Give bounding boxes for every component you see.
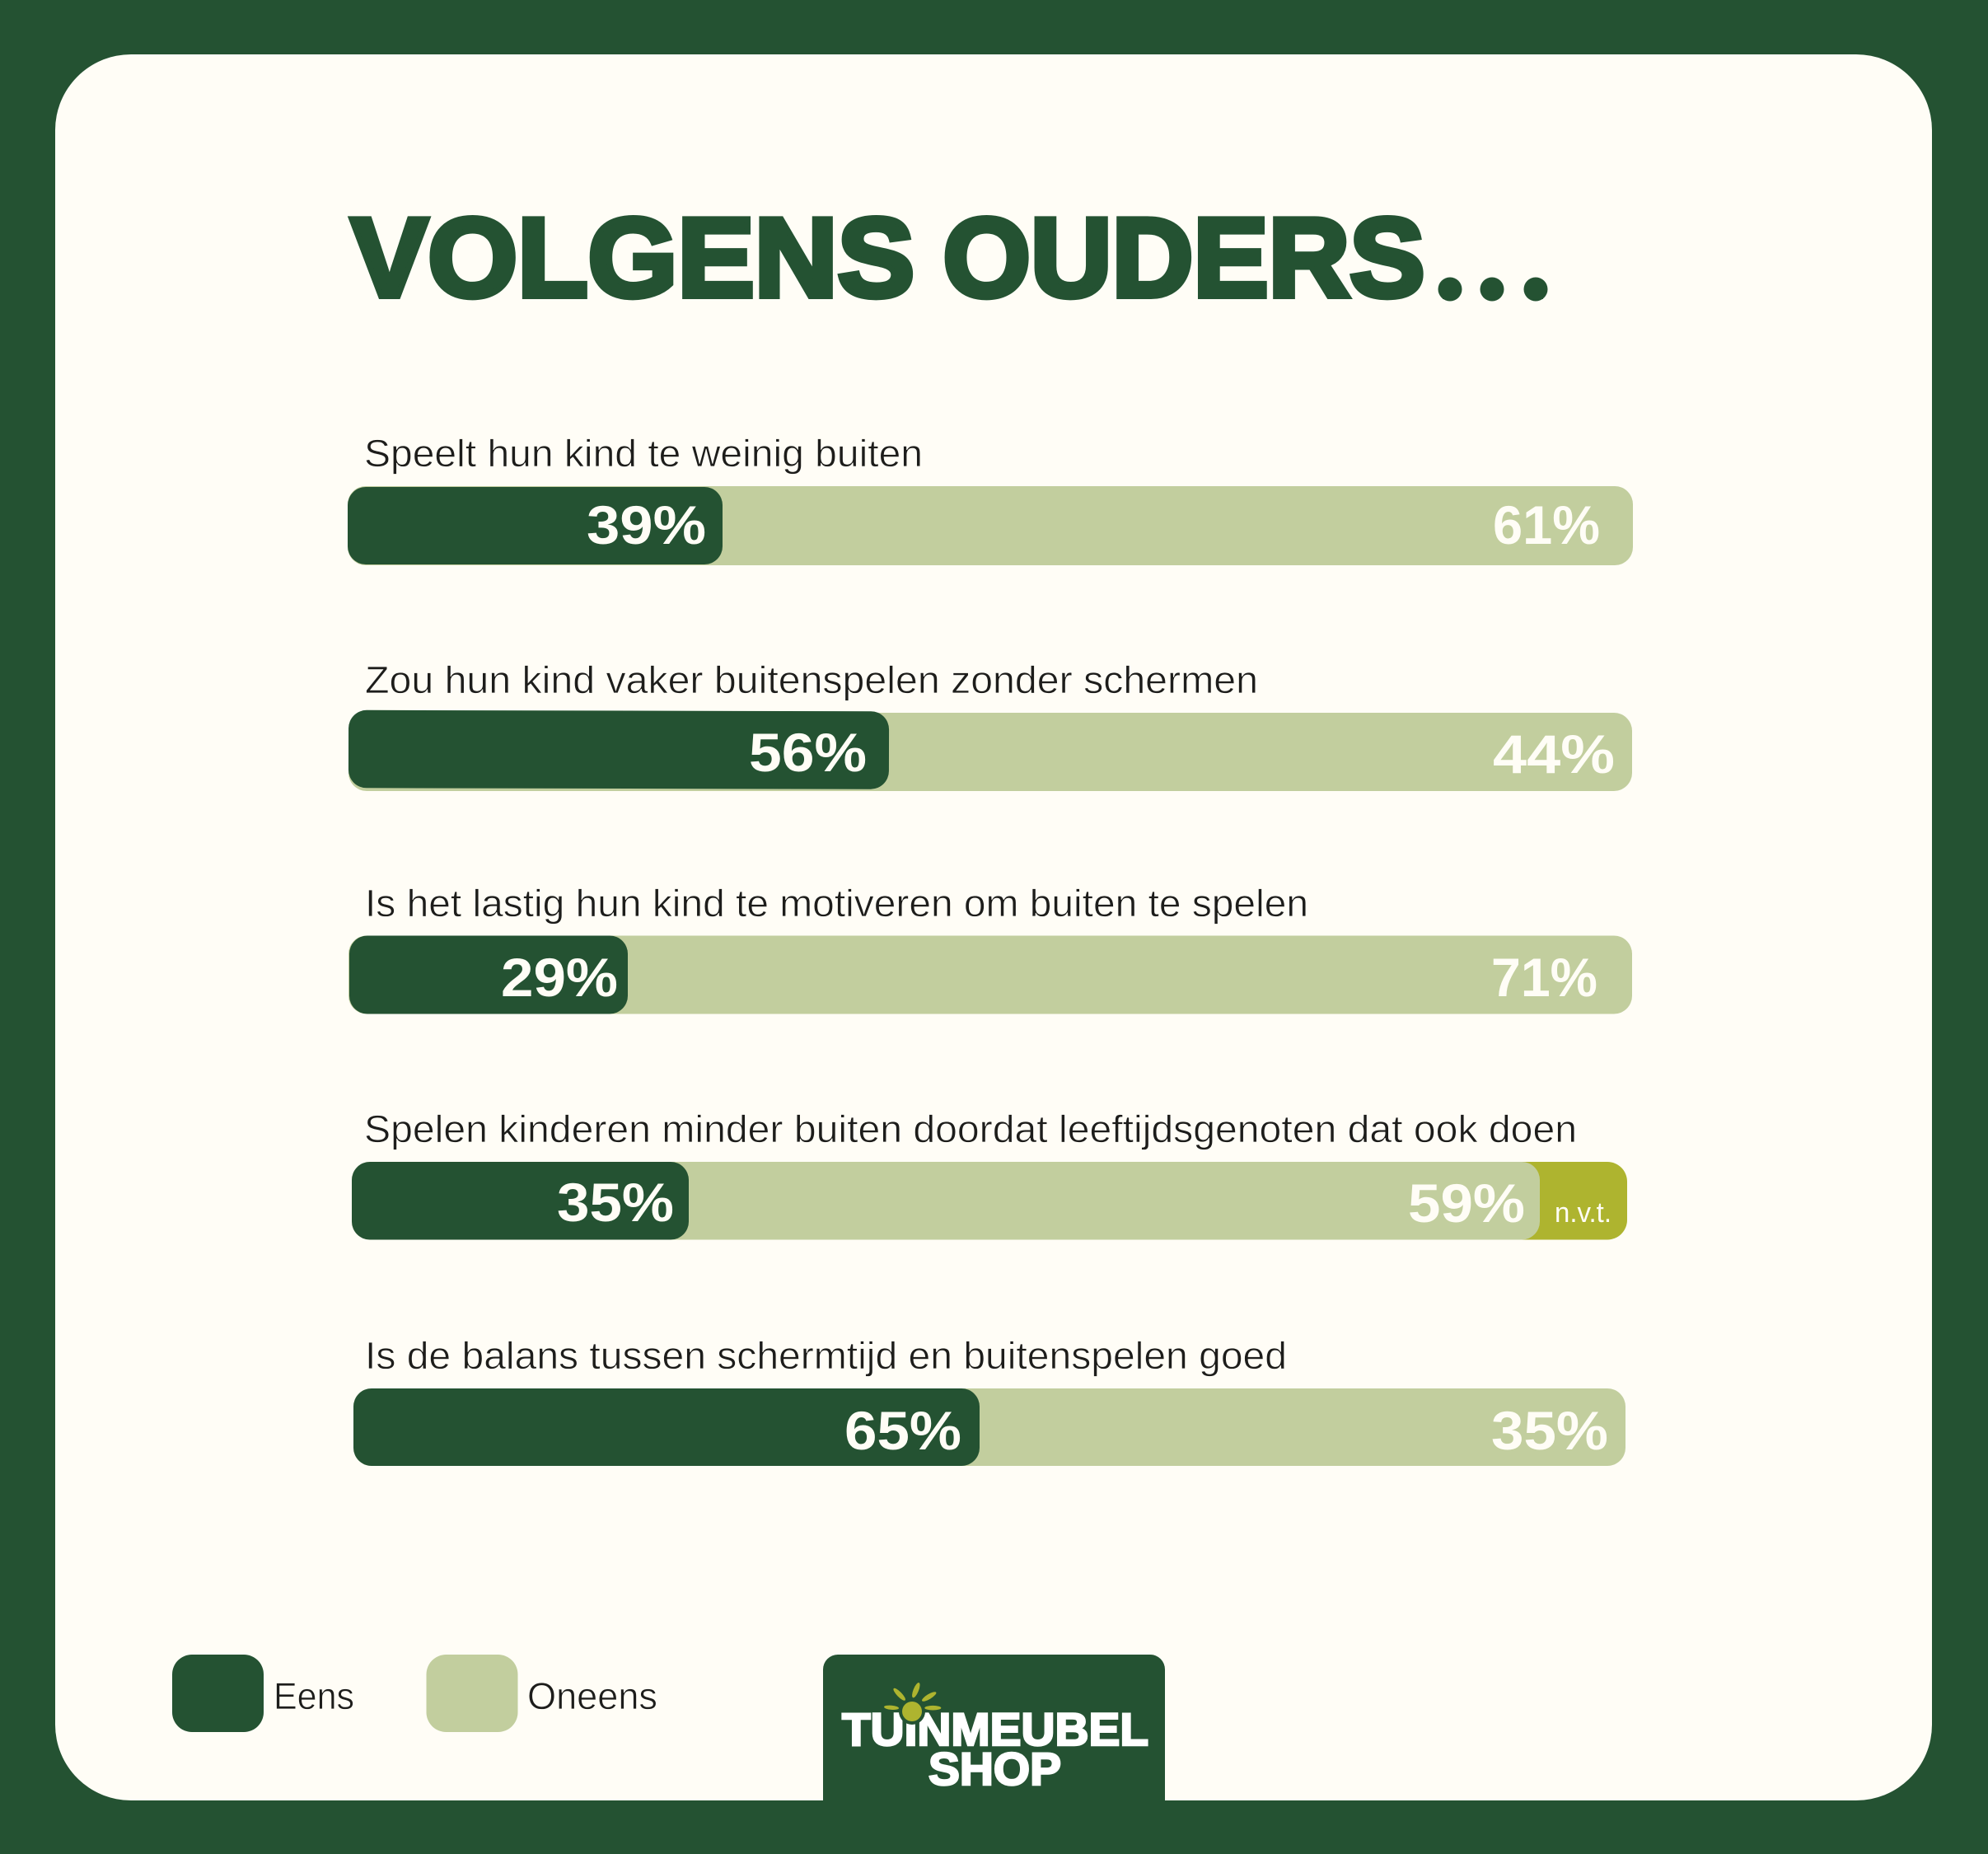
bar: oneens <box>348 936 1632 1014</box>
logo tab <box>823 1655 1165 1805</box>
row 1: speelt te weinig buiten <box>348 432 1633 565</box>
logo wordmark line 2: SHOP <box>929 1743 1061 1795</box>
label: Is de balans tussen schermtijd en buitenspelen goed <box>365 1334 1287 1377</box>
value: oneens: 61% <box>1493 494 1600 555</box>
legend swatch: oneens <box>427 1655 517 1732</box>
value: oneens: 71% <box>1491 947 1597 1008</box>
row 4: minder buiten door leeftijdsgenoten <box>352 1107 1627 1239</box>
row 2: vaker buitenspelen zonder schermen <box>348 658 1632 791</box>
row 5: balans schermtijd en buitenspelen <box>353 1334 1625 1466</box>
label: Speelt hun kind te weinig buiten <box>364 432 923 475</box>
legend label: eens: Eens <box>274 1675 354 1717</box>
legend swatch: eens <box>172 1655 264 1732</box>
value: n.v.t.: n.v.t. <box>1555 1197 1611 1229</box>
bar: eens <box>353 1388 980 1466</box>
title: VOLGENS <box>351 194 914 320</box>
title: ... <box>1439 255 1546 310</box>
bar: oneens <box>348 486 1633 565</box>
value: eens: 39% <box>587 494 706 555</box>
value: eens: 29% <box>501 947 618 1008</box>
bar: eens <box>352 1162 689 1239</box>
row 3: lastig te motiveren <box>348 882 1632 1014</box>
logo wordmark: TUINMEUBEL <box>842 1703 1148 1755</box>
label: Zou hun kind vaker buitenspelen zonder schermen <box>365 658 1258 701</box>
title <box>351 194 1547 320</box>
title: OUDERS <box>943 194 1425 320</box>
value: oneens: 59% <box>1408 1173 1525 1234</box>
bar: oneens <box>348 713 1632 791</box>
icon: sun <box>884 1682 941 1725</box>
bar: eens <box>348 710 889 789</box>
bar: oneens <box>353 1388 1625 1466</box>
bar: eens <box>349 936 628 1014</box>
value: eens: 56% <box>749 722 867 783</box>
logo: tuinmeubel shop <box>823 1655 1165 1805</box>
legend label: oneens: Oneens <box>527 1675 657 1717</box>
bar: oneens <box>352 1162 1540 1239</box>
value: eens: 35% <box>557 1172 674 1233</box>
value: oneens: 44% <box>1493 723 1615 784</box>
value: oneens: 35% <box>1491 1400 1608 1461</box>
value: eens: 65% <box>844 1400 961 1461</box>
bar: n.v.t. <box>1466 1162 1627 1239</box>
label: Spelen kinderen minder buiten doordat leeftijdsgenoten dat ook doen <box>364 1107 1577 1150</box>
legend <box>172 1655 657 1732</box>
bar: eens <box>348 487 723 564</box>
label: Is het lastig hun kind te motiveren om buiten te spelen <box>365 882 1308 925</box>
